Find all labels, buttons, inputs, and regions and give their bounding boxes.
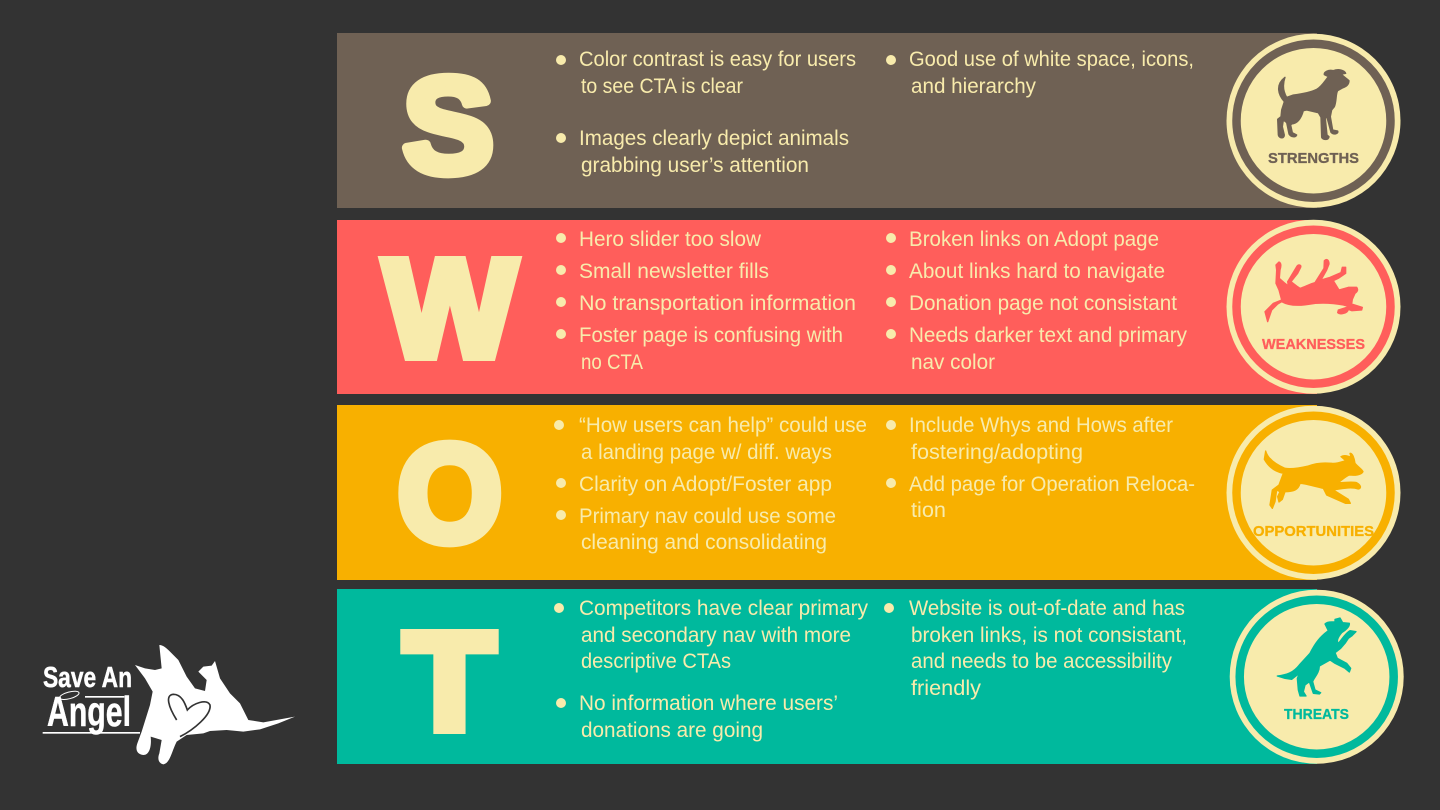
weaknesses column 1: Hero slider too slow xyxy=(579,228,762,251)
strengths letter S: S xyxy=(403,50,494,201)
strengths column 1: Color contrast is easy for users xyxy=(579,48,856,71)
weaknesses column 2: Broken links on Adopt page xyxy=(909,228,1159,251)
weaknesses band xyxy=(337,220,1317,394)
logo wordmark: Save An xyxy=(43,662,132,694)
opportunities column 2: Include Whys and Hows after xyxy=(909,414,1173,437)
threats column 2: friendly xyxy=(911,677,982,700)
strengths column 2: and hierarchy xyxy=(911,75,1036,98)
strengths column 1: Images clearly depict animals xyxy=(579,127,849,150)
opportunities column 1: a landing page w/ diff. ways xyxy=(581,441,832,464)
weaknesses column 2 xyxy=(886,228,1187,374)
opportunities column 2 xyxy=(886,414,1195,522)
opportunities column 2: tion xyxy=(911,499,946,522)
threats column 1: Competitors have clear primary xyxy=(579,597,868,620)
opportunities column 1: Primary nav could use some xyxy=(579,505,836,528)
threats band xyxy=(337,589,1317,764)
icon: standing dog xyxy=(1278,70,1349,139)
threats column 1 xyxy=(554,597,868,742)
icon: rearing dog xyxy=(1277,618,1356,696)
weaknesses badge: WEAKNESSES xyxy=(1262,336,1365,353)
icon: running dog xyxy=(1264,451,1363,508)
opportunities column 2: fostering/adopting xyxy=(911,441,1083,464)
logo animals silhouette xyxy=(135,645,295,764)
opportunities column 1 xyxy=(554,414,867,554)
weaknesses column 1: Foster page is confusing with xyxy=(579,324,843,347)
weaknesses column 1: No transportation information xyxy=(579,292,856,315)
panel: threats xyxy=(337,589,1404,764)
opportunities badge: OPPORTUNITIES xyxy=(1253,523,1374,540)
panel: weaknesses xyxy=(337,220,1400,394)
threats letter T: T xyxy=(404,605,495,759)
strengths band xyxy=(337,33,1317,208)
opportunities badge xyxy=(1226,406,1400,580)
threats column 2: Website is out-of-date and has xyxy=(909,597,1185,620)
opportunities column 1: Clarity on Adopt/Foster app xyxy=(579,473,832,496)
threats column 1: donations are going xyxy=(581,719,763,742)
threats column 2 xyxy=(884,597,1187,700)
threats column 1: No information where users’ xyxy=(579,692,838,715)
threats column 2: broken links, is not consistant, xyxy=(911,624,1187,647)
strengths column 2: Good use of white space, icons, xyxy=(909,48,1194,71)
logo wordmark: Angel xyxy=(47,688,131,735)
opportunities column 2: Add page for Operation Reloca- xyxy=(909,473,1195,496)
logo wordmark xyxy=(43,662,132,735)
threats column 2: and needs to be accessibility xyxy=(911,650,1172,673)
strengths column 1 xyxy=(556,48,856,177)
weaknesses column 2: About links hard to navigate xyxy=(909,260,1165,283)
weaknesses column 2: nav color xyxy=(911,351,995,374)
weaknesses column 2: Needs darker text and primary xyxy=(909,324,1187,347)
strengths column 1: to see CTA is clear xyxy=(581,75,743,98)
icon: dog on its back xyxy=(1265,260,1362,322)
threats badge xyxy=(1230,590,1404,764)
opportunities column 1: “How users can help” could use xyxy=(579,414,867,437)
weaknesses column 1: no CTA xyxy=(581,351,643,374)
strengths badge: STRENGTHS xyxy=(1268,150,1359,167)
weaknesses letter W: W xyxy=(384,232,517,386)
strengths column 1: grabbing user’s attention xyxy=(581,154,809,177)
strengths column 2 xyxy=(886,48,1194,98)
weaknesses badge xyxy=(1226,220,1400,394)
opportunities column 1: cleaning and consolidating xyxy=(581,531,827,554)
logo: Save An Angel xyxy=(43,645,295,764)
opportunities letter O: O xyxy=(398,417,502,571)
threats badge: THREATS xyxy=(1284,706,1349,723)
threats column 1: descriptive CTAs xyxy=(581,650,731,673)
logo heart xyxy=(169,694,210,737)
weaknesses column 1: Small newsletter fills xyxy=(579,260,769,283)
opportunities band xyxy=(337,405,1317,580)
panel: opportunities xyxy=(337,405,1400,580)
logo halo and rules xyxy=(43,690,140,734)
weaknesses column 2: Donation page not consistant xyxy=(909,292,1177,315)
threats column 1: and secondary nav with more xyxy=(581,624,851,647)
panel: strengths xyxy=(337,33,1400,208)
weaknesses column 1 xyxy=(556,228,856,374)
strengths badge xyxy=(1226,34,1400,208)
